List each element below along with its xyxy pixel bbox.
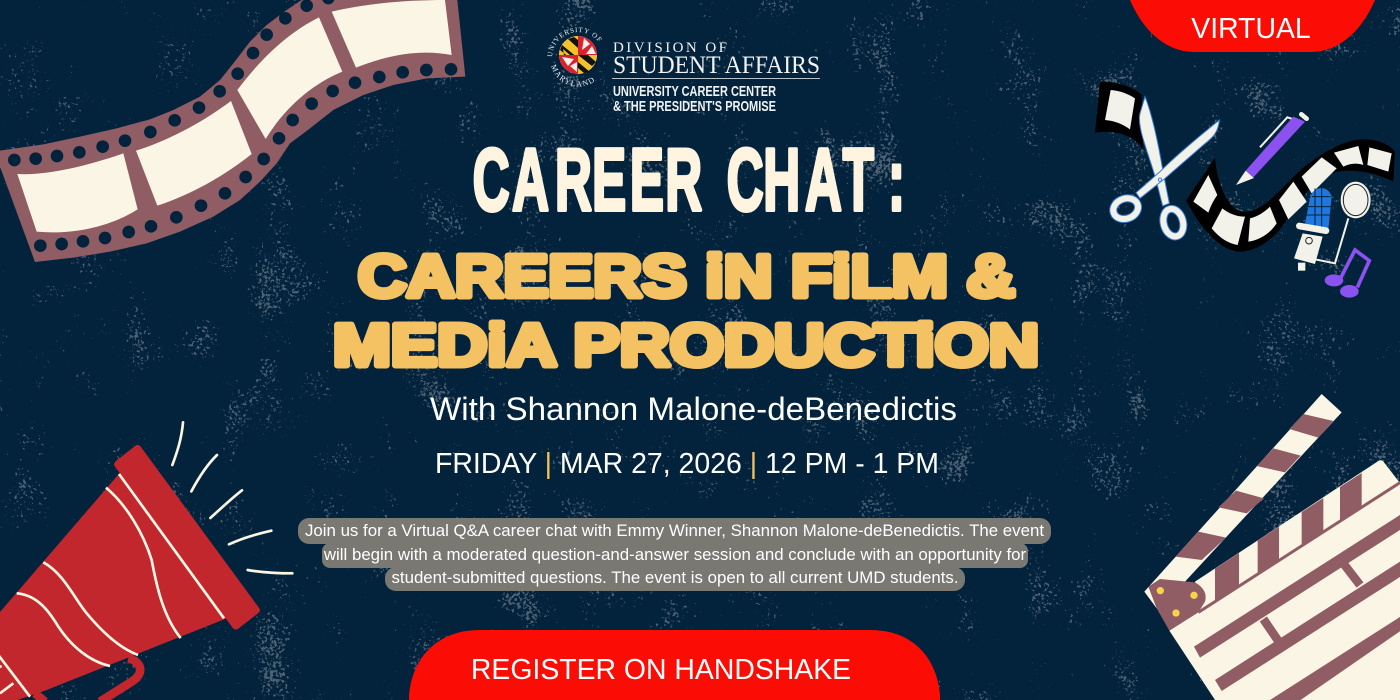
clapper arm	[1144, 394, 1342, 608]
icon: scissors	[1110, 97, 1219, 239]
logo: Division of Student Affairs	[547, 27, 820, 115]
logo wordmark: DIVISION OF	[613, 40, 727, 56]
description panel: student-submitted questions. The event is open to all current UMD students.	[391, 568, 959, 587]
heading: careers in film and media production: MEDiA PRODUCTiON	[333, 312, 1039, 378]
megaphone body	[0, 473, 227, 700]
icon: pen	[1236, 114, 1307, 185]
icon: microphone	[1294, 182, 1371, 271]
button: register on handshake: REGISTER ON HANDSHAKE	[471, 654, 851, 686]
icon: film strip	[1186, 139, 1395, 252]
clapper hinge	[1148, 579, 1206, 631]
logo: Division of Student Affairs: & THE PRESIDENT'S PROMISE	[613, 98, 776, 115]
logo: Division of Student Affairs: STUDENT AFFAIRS	[613, 52, 820, 79]
logo subtitle: UNIVERSITY CAREER CENTER	[613, 83, 776, 100]
date and time: FRIDAY | MAR 27, 2026 | 12 PM - 1 PM	[435, 448, 939, 480]
megaphone rim	[114, 445, 260, 630]
megaphone handle	[35, 658, 140, 700]
seal: University of Maryland: MARYLAND	[551, 64, 594, 87]
speaker line: With Shannon Malone-deBenedictis	[430, 391, 957, 427]
illustration: film strip top left	[0, 0, 465, 262]
seal: University of Maryland: UNIVERSITY OF	[547, 27, 602, 56]
clapper board	[1169, 478, 1400, 700]
icon: music notes	[1325, 250, 1369, 298]
description panel: Join us for a Virtual Q&A career chat with Emmy Winner, Shannon Malone-deBenedictis. The event	[305, 521, 1044, 540]
illustration: clapperboard	[1144, 394, 1400, 700]
icon: film piece	[1095, 82, 1143, 150]
description panel	[298, 518, 1051, 591]
button: register on handshake	[409, 630, 940, 700]
description panel: will begin with a moderated question-and-answer session and conclude with an opportunity for	[323, 545, 1027, 564]
badge: virtual: VIRTUAL	[1191, 13, 1311, 45]
clapper top section	[1195, 460, 1400, 615]
illustration: megaphone	[0, 422, 292, 700]
heading: careers in film and media production	[333, 244, 1039, 378]
badge: virtual	[1130, 0, 1375, 52]
illustration: film production icons	[1095, 82, 1395, 298]
megaphone stripes	[0, 474, 224, 697]
seal: University of Maryland	[547, 27, 602, 87]
heading: careers in film and media production: CAREERS iN FiLM &	[358, 244, 1015, 310]
sound rays	[172, 422, 292, 573]
heading: career chat: CAREER CHAT:	[473, 132, 905, 230]
